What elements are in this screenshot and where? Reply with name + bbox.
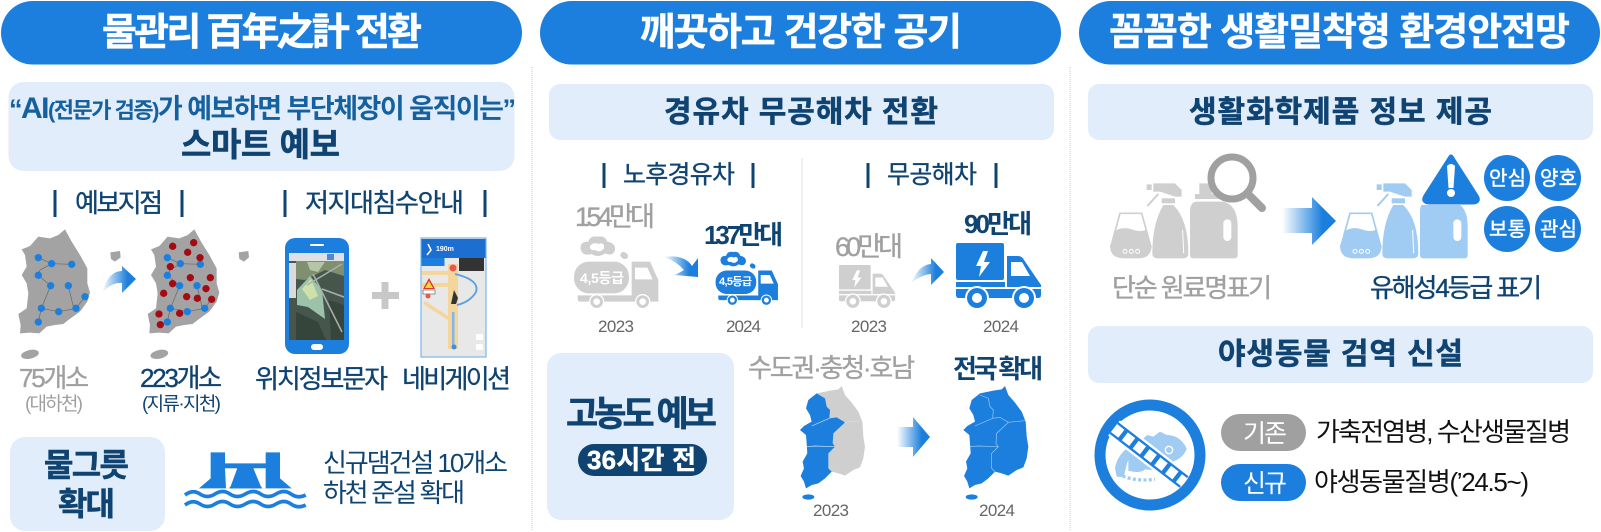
label: navigation: 네비게이션 [402,364,511,394]
panel: smart forecast banner: 스마트 예보 [181,126,340,163]
badges: four hazard grades: 보통 [1489,219,1526,241]
map: 2023 coverage: 수도권·충청·호남 [748,353,915,383]
column 3: living environment safety [1079,1,1600,505]
arrow: map expansion [102,266,136,293]
heading: old diesel cars: 노후경유차 [623,161,735,189]
label: 223 locations: 223개소 [140,363,222,393]
tag row: new wildlife disease [1221,464,1529,501]
arrow: labelling change [1282,197,1336,245]
panel: high-concentration forecast: 36시간 전 [587,445,696,475]
column 2 header pill [540,1,1061,64]
stat: 1.37 million diesel 2024: 2024 [726,317,761,336]
stat: 600 thousand zero-emission 2023: 2023 [851,317,887,336]
map: 223 forecast points [148,229,249,360]
tag row: new wildlife disease: 야생동물질병(’24.5~) [1314,467,1529,497]
panel: smart forecast banner: “AI(전문가 검증)가 예보하면 부단체장이 움직이는” [9,92,516,125]
panel: diesel to zero-emission banner: 경유차 무공해차 전환 [664,96,938,129]
label: simple ingredient listing: 단순 원료명표기 [1112,273,1272,303]
panel: wildlife quarantine banner: 야생동물 검역 신설 [1218,338,1463,371]
map: 2023 coverage: 2023 [813,501,849,520]
stat: 1.54 million diesel 2023: 4,5등급 [580,270,624,286]
heading: forecast points [55,188,182,218]
badges: four hazard grades: 안심 [1489,167,1526,190]
map: 2024 nationwide: 2024 [979,501,1015,520]
map: 75 forecast points [18,229,121,360]
column 3 header pill [1079,1,1600,64]
text: new dams and dredging: 신규댐건설 10개소 [323,448,508,478]
map: 2024 nationwide: 전국 확대 [953,354,1043,384]
column 3 header pill: 꼼꼼한 생활밀착형 환경안전망 [1109,12,1570,54]
text: new dams and dredging [323,448,508,508]
map: 2023 coverage [748,353,915,520]
badges: four hazard grades: 양호 [1540,167,1577,190]
stat: 1.54 million diesel 2023 [574,202,658,336]
panel: wildlife quarantine banner [1088,326,1593,383]
panel: diesel to zero-emission banner [549,84,1054,140]
panel: household chemical info banner [1088,84,1593,140]
heading: forecast points: 예보지점 [75,188,163,218]
stat: 1.37 million diesel 2024: 4,5등급 [719,275,752,288]
panel: expand water container [10,437,165,531]
heading: zero-emission cars: 무공해차 [887,161,977,189]
icon: phone with satellite map [285,238,349,354]
stat: 1.37 million diesel 2024: 137만대 [704,220,783,250]
tag row: new wildlife disease: 신규 [1243,470,1287,498]
icon: dam [185,452,306,507]
arrow: diesel decrease [664,256,698,277]
label: 223 locations: (지류·지천) [142,393,221,415]
column 1 header pill: 물관리 百年之計 전환 [102,12,422,54]
heading: low-lying flood guidance: 저지대침수안내 [305,188,464,218]
column 1 header pill [1,1,522,64]
stat: 600 thousand zero-emission 2023 [835,232,903,336]
column 2: clean air [540,1,1061,520]
panel: expand water container: 확대 [58,486,115,522]
panel: high-concentration forecast [547,353,734,520]
column 2 header pill: 깨끗하고 건강한 공기 [640,12,962,54]
stat: 900 thousand zero-emission 2024: 2024 [983,317,1019,336]
stat: 1.37 million diesel 2024 [704,220,783,336]
badges: four hazard grades: 관심 [1540,218,1577,241]
label: 75 locations: 75개소 [19,363,89,393]
panel: expand water container: 물그릇 [44,447,129,483]
stat: 900 thousand zero-emission 2024 [956,209,1041,336]
arrow: nationwide expansion [897,417,930,457]
stat: 900 thousand zero-emission 2024: 90만대 [964,209,1032,239]
panel: smart forecast banner [8,82,516,171]
stat: 600 thousand zero-emission 2023: 60만대 [835,232,903,262]
stat: 1.54 million diesel 2023: 2023 [598,317,634,336]
tag row: existing diseases [1221,414,1571,451]
tag row: existing diseases: 기존 [1243,420,1287,448]
arrow: zero-emission increase [911,258,944,285]
stat: 1.54 million diesel 2023: 154만대 [575,202,655,232]
icon: gray products with magnifier [1110,157,1262,258]
panel: household chemical info banner: 생활화학제품 정보 제공 [1189,96,1492,129]
column dividers [532,67,1070,530]
map: 2024 nationwide [953,354,1043,520]
label: 223 locations [140,363,222,415]
icon: blue products with warning [1340,157,1483,258]
label: four-grade hazard labelling: 유해성4등급 표기 [1370,273,1542,303]
badges: four hazard grades [1484,155,1581,252]
label: 75 locations: (대하천) [25,393,83,415]
panel: high-concentration forecast: 고농도 예보 [566,395,717,434]
icon: navigation screen [421,238,486,357]
column 1: water management [1,1,522,531]
icon: navigation screen: 190m [436,246,454,253]
icon: banned reptile [1100,405,1200,505]
tag row: existing diseases: 가축전염병, 수산생물질병 [1316,417,1571,447]
label: location text message: 위치정보문자 [255,364,388,394]
label: 75 locations [19,363,89,415]
icon: plus sign [372,282,399,309]
text: new dams and dredging: 하천 준설 확대 [323,478,465,508]
